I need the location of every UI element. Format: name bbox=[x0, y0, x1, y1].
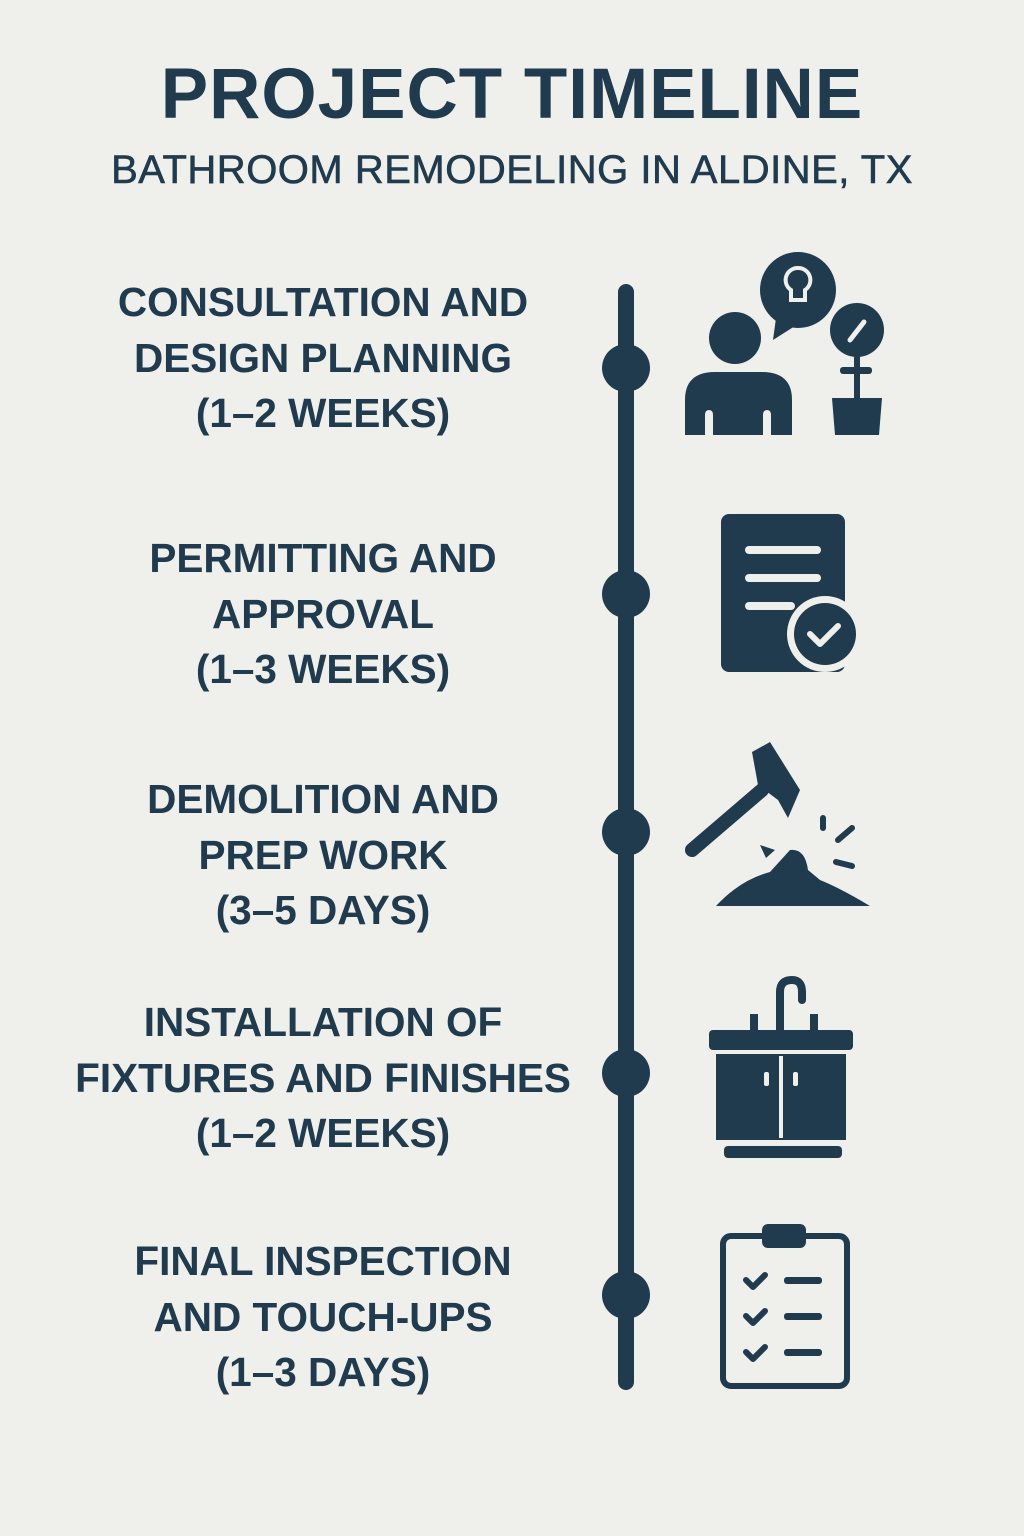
timeline line bbox=[602, 284, 650, 1390]
step 2 text bbox=[149, 535, 497, 692]
step 1 text: DESIGN PLANNING bbox=[134, 334, 512, 380]
step 3 text: (3–5 DAYS) bbox=[216, 887, 430, 933]
icon: consultation bbox=[685, 252, 884, 435]
title: PROJECT TIMELINE bbox=[161, 55, 863, 134]
step 5 text: AND TOUCH-UPS bbox=[153, 1294, 492, 1340]
step 4 text bbox=[75, 999, 571, 1156]
step 3 text bbox=[147, 776, 499, 933]
icon: vanity sink bbox=[709, 980, 853, 1158]
step 2 text: (1–3 WEEKS) bbox=[196, 646, 450, 692]
step 1 text: CONSULTATION AND bbox=[118, 279, 528, 325]
icon: checklist clipboard bbox=[723, 1224, 847, 1386]
subtitle: BATHROOM REMODELING IN ALDINE, TX bbox=[111, 148, 913, 192]
step 2 text: PERMITTING AND bbox=[149, 535, 497, 581]
step 1 text bbox=[118, 279, 528, 436]
icon: demolition hammer bbox=[692, 742, 870, 906]
step 3 text: DEMOLITION AND bbox=[147, 776, 499, 822]
step 5 text bbox=[134, 1238, 512, 1395]
step 5 text: FINAL INSPECTION bbox=[134, 1238, 512, 1284]
step 3 text: PREP WORK bbox=[198, 832, 448, 878]
icon: permit document bbox=[721, 514, 863, 672]
step 2 text: APPROVAL bbox=[212, 590, 434, 636]
step 4 text: FIXTURES AND FINISHES bbox=[75, 1054, 571, 1100]
step 5 text: (1–3 DAYS) bbox=[216, 1349, 430, 1395]
step 4 text: (1–2 WEEKS) bbox=[196, 1110, 450, 1156]
step 4 text: INSTALLATION OF bbox=[144, 999, 502, 1045]
step 1 text: (1–2 WEEKS) bbox=[196, 390, 450, 436]
